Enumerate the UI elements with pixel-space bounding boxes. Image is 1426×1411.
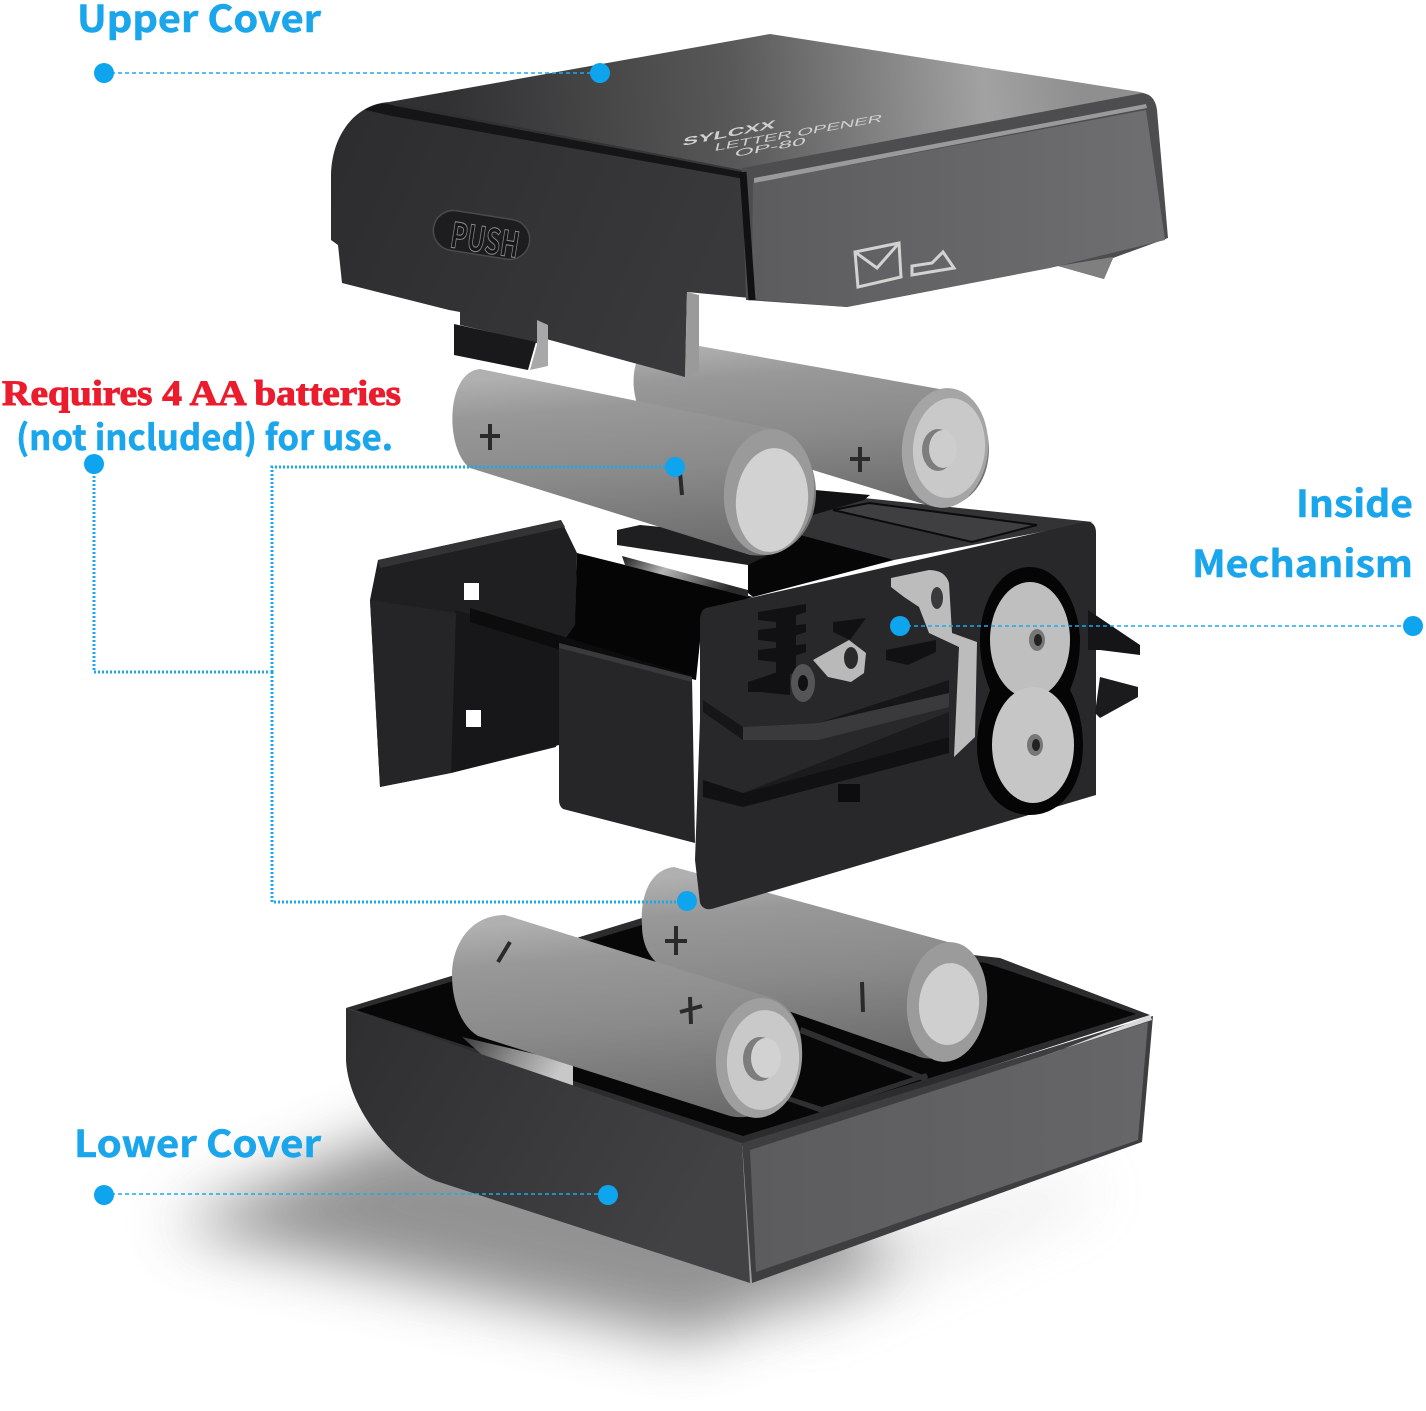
right face <box>742 1016 1153 1283</box>
clip tab <box>454 324 536 370</box>
rear frame wall <box>370 520 577 787</box>
cutter wheel ring <box>977 567 1083 815</box>
plus and minus marks <box>480 424 682 495</box>
cutter wheel lower <box>992 687 1074 803</box>
plus and minus marks <box>498 942 702 1024</box>
upper cover <box>331 34 1168 377</box>
top face <box>389 34 1148 170</box>
interior cavity <box>559 553 753 680</box>
lower ledge <box>703 737 949 807</box>
callout: inside mechanism <box>890 616 1423 636</box>
upper ledge <box>703 680 949 740</box>
push button <box>430 207 533 269</box>
left wall panel <box>370 600 456 787</box>
callout: upper cover <box>94 63 610 83</box>
front upper battery <box>452 369 819 559</box>
heading: inside mechanism: Mechanism <box>1192 534 1413 588</box>
main plate <box>695 522 1096 909</box>
blade tips <box>1088 610 1140 655</box>
deck pad <box>833 503 1037 542</box>
top deck <box>798 498 1093 560</box>
metal spring <box>891 570 977 757</box>
back lower battery <box>642 867 992 1065</box>
rear window bottom <box>466 710 481 727</box>
plus mark <box>850 447 870 472</box>
right face <box>742 93 1168 307</box>
brand label: LETTER OPENER <box>713 113 884 154</box>
left face <box>346 1008 750 1283</box>
callout: batteries <box>84 454 697 911</box>
front side panel <box>559 643 695 843</box>
brand label: SYLCXX <box>681 119 777 149</box>
cover rim <box>346 918 1150 1146</box>
front lower battery <box>452 915 807 1122</box>
round post <box>791 664 815 702</box>
push label: PUSH <box>447 207 523 269</box>
cover interior <box>356 925 1136 1136</box>
brand label <box>681 113 884 160</box>
left face <box>331 102 750 377</box>
heading: lower cover: Lower Cover <box>74 1114 322 1168</box>
subheading: not included: (not included) for use. <box>16 410 393 461</box>
back upper battery <box>634 339 993 512</box>
heading: inside mechanism: Inside <box>1296 474 1413 528</box>
square notch <box>838 784 860 802</box>
icon: blade <box>912 252 954 275</box>
heading: battery requirement: Requires 4 AA batteries <box>2 373 401 413</box>
rear window top <box>464 583 479 600</box>
underside tab <box>1058 257 1113 279</box>
floor shadow <box>170 1130 1100 1340</box>
small lever <box>813 640 866 682</box>
brand label: OP-80 <box>733 136 807 160</box>
callout: lower cover <box>94 1185 618 1205</box>
comb teeth <box>748 604 936 695</box>
plus and minus marks <box>665 926 863 1012</box>
inside mechanism <box>370 490 1140 909</box>
cutter wheel upper <box>990 582 1070 698</box>
lower cover <box>346 918 1153 1283</box>
heading: inside mechanism <box>1192 474 1413 588</box>
icon: envelope <box>855 243 901 287</box>
